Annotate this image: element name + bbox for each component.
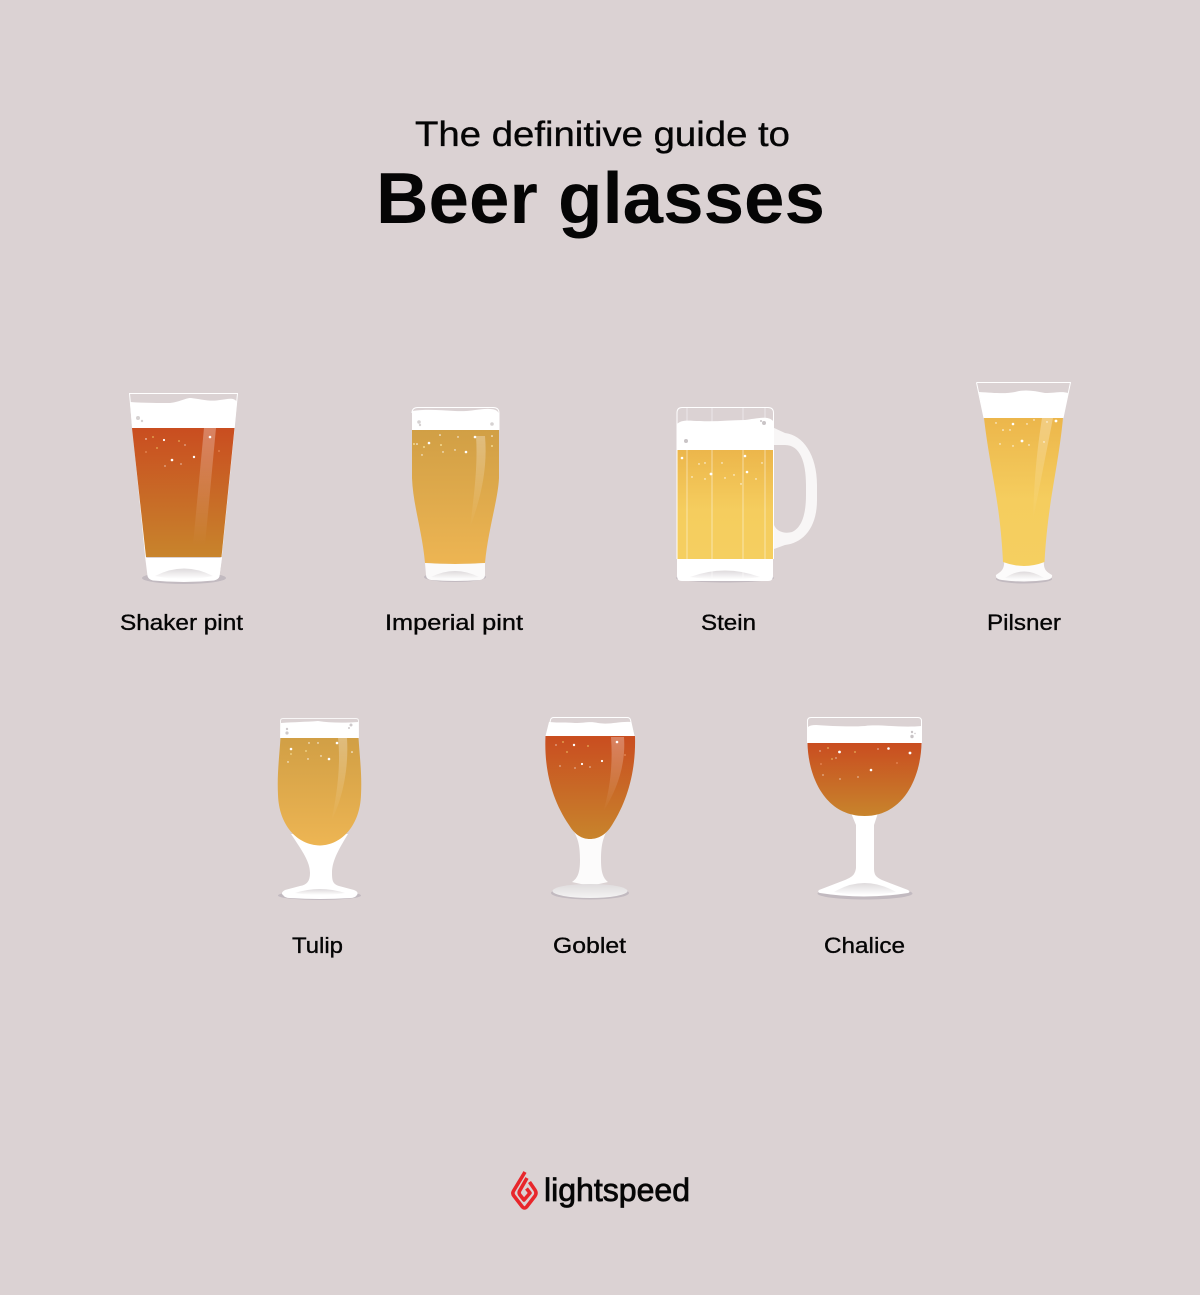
label: imperial pint: Imperial pint [385,610,524,635]
glass: pilsner [976,382,1070,584]
foam [130,398,237,428]
glass: goblet [545,718,635,900]
glass: shaker pint [130,394,238,584]
glass outline [976,382,1070,418]
goblet foot [552,884,628,898]
main heading: Beer glasses [376,159,825,239]
glass outline [412,408,499,430]
shadow [278,891,361,900]
glass: chalice [808,718,922,900]
shadow [551,886,629,900]
label: pilsner: Pilsner [987,610,1062,635]
beer [132,428,234,557]
title [376,115,825,239]
shadow [996,574,1052,584]
beer [278,738,361,846]
shadow [424,572,486,582]
beer [677,450,774,559]
shadow [676,574,774,582]
stem and foot [572,828,608,886]
mug handle [771,427,817,549]
wordmark: lightspeed [544,1172,690,1208]
foam [280,721,358,738]
label: goblet: Goblet [553,933,627,958]
beer [984,418,1063,566]
bubbles [681,420,766,485]
shadow [142,572,226,584]
glass base [425,563,485,581]
label: tulip: Tulip [292,933,343,958]
bubbles [413,420,494,456]
foam [808,725,922,743]
label: stein: Stein [701,610,756,635]
shadow [818,888,912,900]
glass: tulip [278,718,361,900]
glass: imperial pint [412,408,499,582]
glass outline [808,718,922,743]
label: chalice: Chalice [824,933,905,958]
beer [412,430,499,564]
label: shaker pint: Shaker pint [120,610,244,635]
bubbles [136,416,220,467]
beer [808,743,922,816]
glass foot [996,560,1052,582]
highlight [470,436,486,528]
highlight [193,428,216,545]
bubbles [819,731,916,780]
highlight [331,738,347,822]
foam [677,418,773,450]
glass base [677,559,773,581]
glass outline [280,718,358,738]
glass outline [547,718,634,736]
stem and foot [282,834,358,899]
foam [979,390,1068,418]
glass base [146,558,222,582]
logo: lightspeed [513,1172,690,1208]
subtitle: The definitive guide to [415,115,790,154]
beer [545,736,635,839]
glass outline [130,394,238,582]
bubbles [995,419,1057,447]
glass: stein [676,408,817,582]
highlight [603,737,624,812]
foam [412,409,499,430]
glass outline and facets [677,408,774,578]
stem and foot [818,813,910,896]
foam [546,722,634,736]
highlight [1033,418,1053,520]
icon: red flame [513,1172,536,1208]
bubbles [555,741,626,769]
bubbles [285,724,353,763]
